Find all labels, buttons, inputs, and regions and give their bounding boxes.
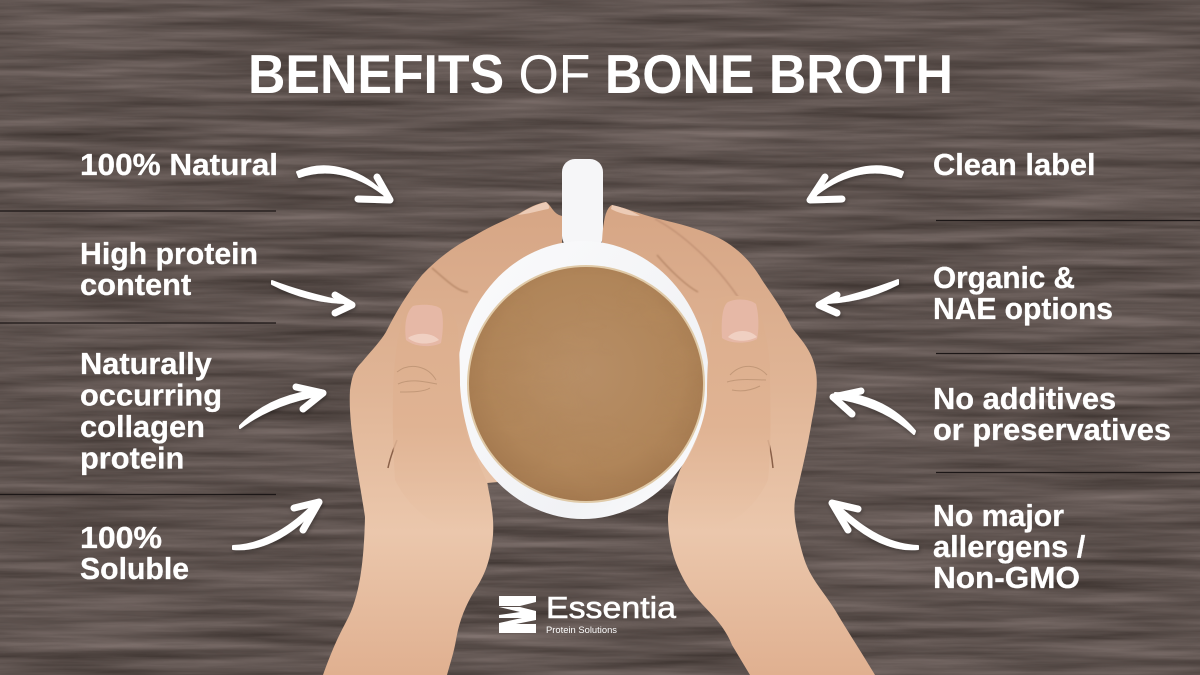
- left fingertip highlight: [518, 202, 549, 215]
- benefit: 100% Soluble: Soluble: [80, 551, 189, 586]
- benefit: Naturally occurring collagen protein: Naturally: [80, 346, 212, 381]
- benefit: Naturally occurring collagen protein: collagen: [80, 409, 205, 444]
- right finger crease: [655, 219, 740, 300]
- benefit: High protein content: content: [80, 267, 191, 302]
- benefit: Organic and NAE options: Organic &: [933, 260, 1075, 295]
- arrow: organic: [819, 280, 898, 313]
- benefit: 100% Soluble: 100%: [80, 520, 162, 555]
- benefit: Organic and NAE options: NAE options: [933, 291, 1113, 326]
- arrow: no additives: [833, 391, 915, 434]
- logo icon: [499, 596, 536, 633]
- left finger crease: [432, 268, 468, 292]
- left knuckle creases: [397, 366, 437, 392]
- logo: Essentia: [499, 590, 677, 636]
- left thumb: [393, 303, 493, 536]
- mug body: [457, 241, 709, 519]
- benefit: Naturally occurring collagen protein: protein: [80, 440, 184, 476]
- right thumb: [668, 296, 770, 530]
- arrow: collagen: [240, 387, 323, 428]
- right palm fold: [768, 440, 773, 468]
- mug handle: [562, 159, 603, 249]
- title: BENEFITS OF BONE BROTH: [248, 43, 953, 105]
- logo wordmark: Essentia: [546, 590, 677, 625]
- left hand: palm and fingers: [323, 202, 562, 675]
- benefit: No major allergens / Non-GMO: Non-GMO: [933, 560, 1080, 595]
- arrow: High protein: [272, 281, 352, 313]
- arrow: no major allergens: [832, 502, 918, 549]
- divider lines: [0, 211, 1200, 494]
- benefit: 100% Natural: 100% Natural: [80, 147, 278, 182]
- benefit: No major allergens / Non-GMO: No major: [933, 498, 1064, 533]
- right hand: palm and fingers: [602, 205, 875, 675]
- left palm fold: [388, 440, 397, 468]
- benefit: Clean label: Clean label: [933, 147, 1096, 182]
- arrow: 100% Natural: [297, 166, 390, 200]
- benefit: No additives or preservatives: or preservatives: [933, 412, 1171, 447]
- benefit: High protein content: High protein: [80, 236, 258, 271]
- benefit: Naturally occurring collagen protein: occurring: [80, 378, 222, 412]
- right fingertip highlight: [611, 205, 640, 216]
- benefit: No additives or preservatives: No additives: [933, 381, 1116, 416]
- right knuckle creases: [727, 366, 767, 391]
- benefit: No major allergens / Non-GMO: allergens /: [933, 529, 1086, 564]
- arrow: clean label: [810, 166, 903, 200]
- left thumbnail: [405, 305, 443, 346]
- right thumbnail: [722, 300, 758, 343]
- arrow: soluble: [233, 502, 319, 549]
- logo tagline: Protein Solutions: [546, 625, 617, 636]
- broth surface: [467, 265, 705, 503]
